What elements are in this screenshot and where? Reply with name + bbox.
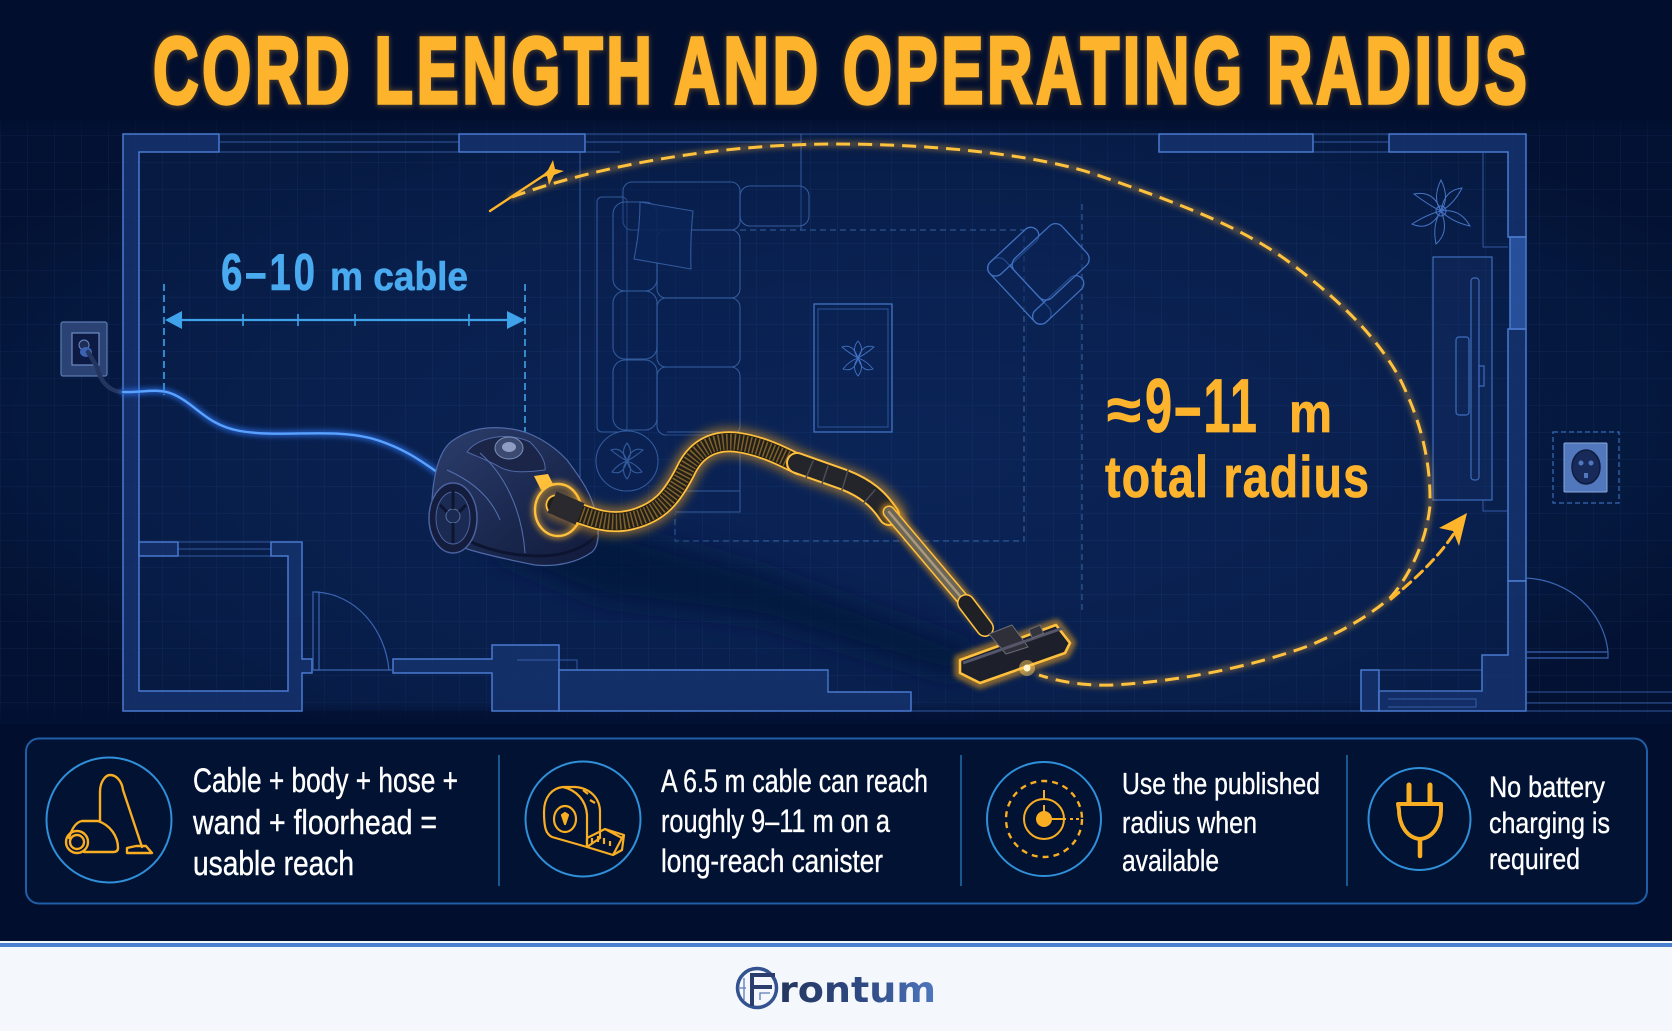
vacuum shadow: [480, 525, 980, 680]
Frontum logo: rontum: [779, 970, 936, 1011]
info panel: [26, 738, 1647, 904]
title: CORD LENGTH AND OPERATING RADIUS: [153, 18, 1527, 124]
logo emblem: [738, 968, 776, 1008]
plant: [1412, 180, 1470, 244]
info item 3: published radius: available: [1122, 843, 1219, 878]
coffee table: [814, 304, 892, 432]
info item 3: published radius: radius when: [1122, 805, 1257, 840]
label: 6-10 m cable: [221, 243, 468, 301]
sofa: [596, 182, 809, 512]
info item 2: 6.5 m cable example: A 6.5 m cable can reach: [661, 763, 928, 799]
flexible hose: [552, 442, 892, 522]
power cable: [123, 391, 437, 472]
info item 3: published radius: Use the published: [1122, 766, 1320, 801]
info item 1: usable reach: wand + floorhead =: [192, 804, 437, 842]
icon: vacuum: [66, 775, 152, 853]
icon: radius target: [1006, 781, 1082, 857]
rug and dashed guides: [675, 204, 1082, 613]
info item 2: 6.5 m cable example: [526, 762, 928, 879]
operating radius dashed path: [512, 144, 1455, 685]
label: total radius: m: [1289, 381, 1332, 444]
thin window and partition lines: [178, 134, 1672, 711]
floorhead: [960, 625, 1070, 683]
label: 6-10 m cable: m cable: [330, 255, 468, 299]
label: 6-10 m cable: 6–10: [221, 243, 315, 301]
door left: [312, 592, 393, 670]
telescopic wand: [889, 512, 985, 628]
hose connection ring: [535, 484, 581, 536]
start marker arrow: [490, 160, 564, 211]
info item 4: no battery: [1368, 768, 1610, 876]
floor plan walls: [123, 134, 1526, 711]
info item 1: usable reach: [46, 758, 458, 883]
dimension: cable length: [164, 284, 525, 445]
info item 4: no battery: No battery: [1489, 771, 1605, 804]
info item 4: no battery: required: [1489, 843, 1580, 876]
armchair: [984, 210, 1102, 328]
label: total radius: ≈: [1107, 376, 1141, 443]
info item 2: 6.5 m cable example: long-reach canister: [661, 843, 883, 879]
blueprint floor area background: [0, 112, 1672, 724]
info item 1: usable reach: Cable + body + hose +: [193, 762, 458, 800]
footer band: [0, 941, 1672, 1031]
TV console: [1433, 257, 1492, 500]
door right: [1526, 578, 1608, 658]
info item 4: no battery: charging is: [1489, 807, 1610, 840]
wall outlet with plug: [61, 322, 124, 392]
label: total radius: total radius: [1105, 445, 1369, 510]
label: total radius: 9–11: [1145, 363, 1257, 449]
spare socket right: [1553, 432, 1619, 503]
vacuum canister body: [429, 428, 598, 565]
info item 2: 6.5 m cable example: roughly 9–11 m on a: [661, 803, 890, 839]
hose cuff and elbow: [797, 461, 889, 515]
info item 3: published radius: [987, 762, 1320, 878]
radius arrow head: [1439, 513, 1467, 546]
title: CORD LENGTH AND OPERATING RADIUS: [153, 18, 1527, 124]
panel dividers: [499, 755, 1347, 886]
icon: tape measure: [544, 787, 624, 855]
label: total radius: [1105, 363, 1369, 510]
info item 1: usable reach: usable reach: [193, 845, 354, 883]
icon: power plug: [1398, 785, 1441, 856]
